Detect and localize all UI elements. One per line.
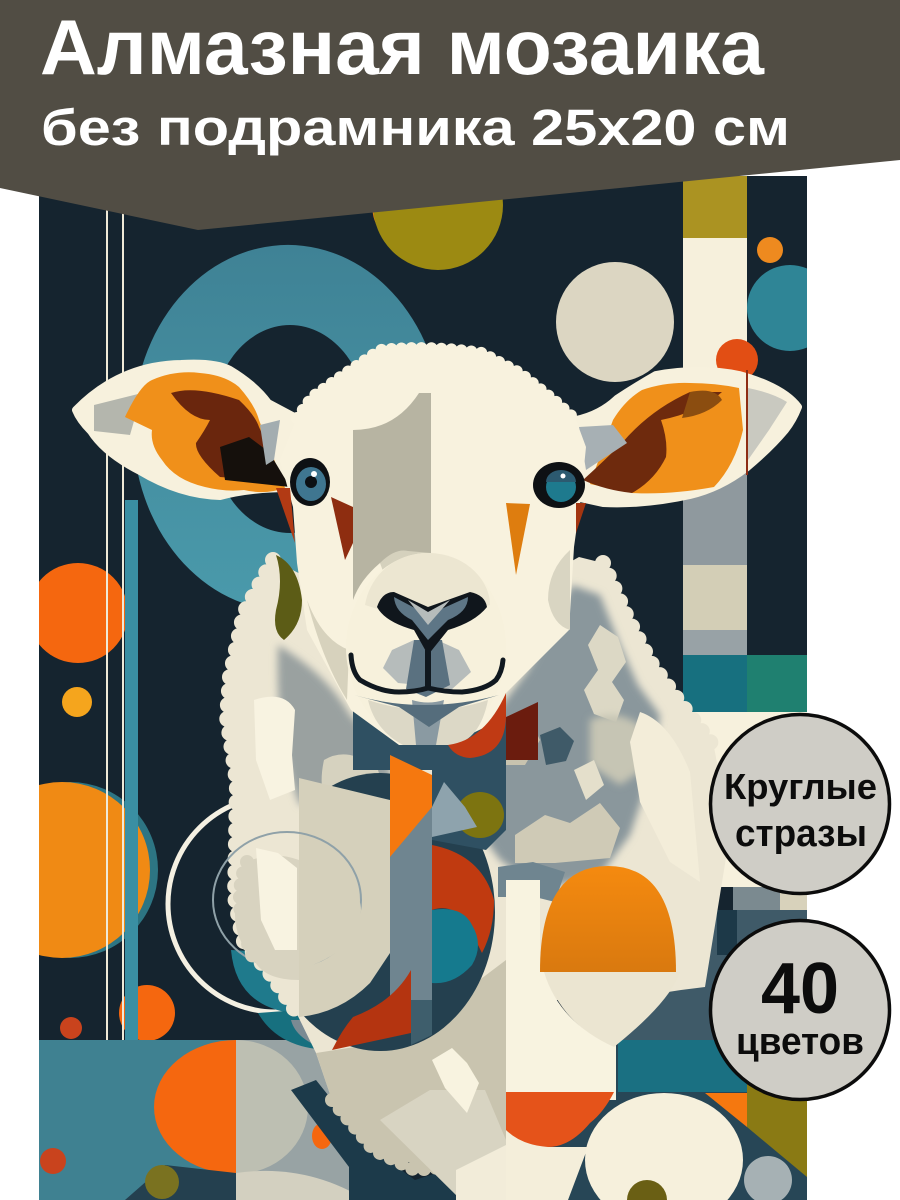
sheep — [76, 348, 798, 1200]
artwork background — [39, 176, 807, 1200]
nose and mouth — [351, 592, 503, 692]
muzzle — [346, 553, 424, 668]
badge: round rhinestones: стразы — [735, 813, 867, 855]
red accents under chin — [353, 700, 538, 770]
eye: left — [290, 458, 330, 506]
ear: left — [76, 364, 300, 496]
subtitle: без подрамника 25х20 см — [41, 99, 790, 156]
head — [280, 348, 586, 745]
badge: 40 colours: 40 — [761, 949, 839, 1029]
beige circle — [556, 262, 674, 382]
badge: round rhinestones — [710, 714, 890, 894]
olive wool patch — [275, 555, 302, 640]
right wool grey shading — [478, 585, 660, 890]
right circles — [716, 237, 807, 375]
teal patch under ring — [231, 950, 314, 1049]
chin red accent — [448, 693, 506, 758]
chest geometric circle — [299, 755, 506, 1051]
white ring — [166, 804, 283, 1013]
vertical lines — [106, 190, 138, 1040]
right column stripes — [616, 176, 807, 1040]
eye: right — [533, 462, 585, 508]
orange egg on wool — [506, 866, 676, 1047]
title: Алмазная мозаика — [40, 3, 765, 91]
badge: round rhinestones: Круглые — [724, 766, 877, 807]
artwork: geometric sheep mosaic — [39, 176, 807, 1200]
badge: 40 colours: цветов — [736, 1021, 864, 1063]
left orange circles — [39, 563, 175, 1040]
bottom left blocks — [39, 1040, 366, 1200]
ear: right — [576, 370, 798, 503]
header banner — [0, 0, 900, 230]
streaks around eyes — [276, 488, 586, 575]
wool paw in ring — [213, 832, 361, 980]
wedge dark — [291, 1080, 461, 1200]
wool body — [227, 557, 730, 1200]
bottom right blocks — [506, 1040, 807, 1200]
badge: 40 colours — [710, 920, 890, 1100]
top olive circle — [372, 200, 503, 270]
teal ring — [133, 245, 443, 611]
